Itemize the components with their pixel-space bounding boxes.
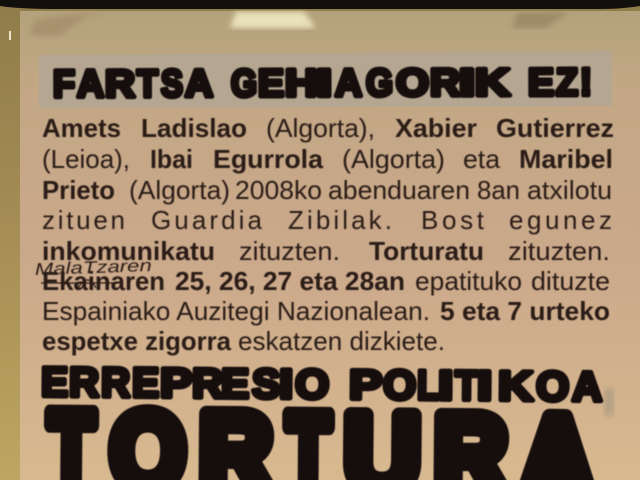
heading: errepresio politikoa <box>41 358 602 410</box>
heading: errepresio politikoa: I <box>438 361 453 409</box>
body text: Prieto <box>42 175 115 205</box>
body text: zituzten. <box>239 236 340 266</box>
title: fartsa gehiagorik ez: R <box>105 63 135 106</box>
body text: Ibai <box>150 144 193 174</box>
shadow beside second heading <box>604 388 614 416</box>
body text: Amets <box>42 113 121 143</box>
pin marks <box>9 31 11 40</box>
tape shadow left <box>30 13 110 36</box>
body text: dituzte <box>531 266 610 296</box>
heading: errepresio politikoa: E <box>41 358 68 405</box>
body text: (Algorta) <box>342 144 445 174</box>
heading: errepresio politikoa: I <box>279 360 293 407</box>
body text: (Algorta) <box>129 175 230 205</box>
headline: tortura <box>48 389 594 480</box>
body text: 25, 26, 27 eta 28an <box>175 266 405 296</box>
heading: errepresio politikoa: E <box>221 360 249 407</box>
body text: epatituko <box>415 266 522 296</box>
title: fartsa gehiagorik ez: G <box>231 62 257 105</box>
title: fartsa gehiagorik ez: A <box>335 62 362 105</box>
heading: errepresio politikoa: E <box>132 359 159 406</box>
body text: Ladislao <box>141 113 247 143</box>
body text: espetxe zigorra <box>42 326 232 356</box>
body text: zituen <box>42 205 125 235</box>
heading: errepresio politikoa: R <box>69 358 99 406</box>
title: fartsa gehiagorik ez: ! <box>580 61 592 104</box>
body text: Zibilak. <box>288 205 392 235</box>
body text: Torturatu <box>369 236 484 266</box>
heading: errepresio politikoa: O <box>295 360 329 408</box>
heading: errepresio politikoa: O <box>383 361 416 408</box>
title: fartsa gehiagorik ez: K <box>475 61 510 105</box>
title: fartsa gehiagorik ez <box>53 61 592 106</box>
body text: 2008ko <box>235 175 322 205</box>
body text: Espainiako Auzitegi Nazionalean. <box>42 296 430 326</box>
heading: errepresio politikoa: R <box>192 359 223 407</box>
heading: errepresio politikoa: I <box>477 362 492 409</box>
body text: eta <box>463 144 501 174</box>
body text: (Algorta), <box>266 113 375 143</box>
body text: (Leioa), <box>42 144 130 174</box>
title: fartsa gehiagorik ez: G <box>366 62 393 105</box>
title: fartsa gehiagorik ez: A <box>77 63 104 106</box>
handwritten correction: MalaTzaren <box>34 256 152 279</box>
heading: errepresio politikoa: A <box>572 363 602 410</box>
title: fartsa gehiagorik ez: I <box>316 62 332 105</box>
body text: Ekainaren <box>42 266 165 296</box>
heading band <box>39 51 612 108</box>
heading: errepresio politikoa: P <box>160 359 192 406</box>
light reflection <box>230 12 316 28</box>
heading: errepresio politikoa: P <box>349 361 382 408</box>
title: fartsa gehiagorik ez: E <box>528 61 554 104</box>
body text: Bost <box>421 205 485 235</box>
body text: abenduaren <box>328 175 470 205</box>
body text: 8an <box>477 175 520 205</box>
body text: Gutierrez <box>496 113 614 143</box>
handwritten correction <box>34 256 152 288</box>
heading: errepresio politikoa: O <box>536 362 569 410</box>
body text: Xabier <box>395 113 477 143</box>
title: fartsa gehiagorik ez: Z <box>556 61 578 104</box>
title: fartsa gehiagorik ez: O <box>396 62 429 105</box>
heading: errepresio politikoa: K <box>498 362 533 409</box>
title: fartsa gehiagorik ez: A <box>185 62 213 106</box>
body text: zituzten. <box>508 236 610 266</box>
body text: 5 eta 7 urteko <box>440 296 610 326</box>
title: fartsa gehiagorik ez: F <box>53 63 75 106</box>
title: fartsa gehiagorik ez: I <box>459 62 475 105</box>
body text: eskatzen dizkiete. <box>238 326 445 356</box>
dark top frame <box>0 0 640 9</box>
title: fartsa gehiagorik ez: S <box>161 63 183 106</box>
tape shadow right <box>512 12 570 28</box>
title: fartsa gehiagorik ez: H <box>285 62 317 105</box>
heading: errepresio politikoa: S <box>252 360 280 407</box>
body text: atxilotu <box>527 175 612 205</box>
heading: errepresio politikoa: L <box>417 361 439 408</box>
heading: errepresio politikoa: T <box>455 362 478 409</box>
body text: egunez <box>509 205 612 235</box>
body text: inkomunikatu <box>42 236 215 266</box>
body text: Egurrola <box>213 144 324 174</box>
title: fartsa gehiagorik ez: R <box>430 62 460 105</box>
title: fartsa gehiagorik ez: T <box>137 63 158 106</box>
body text <box>42 113 614 356</box>
heading: errepresio politikoa: R <box>101 359 130 406</box>
title: fartsa gehiagorik ez: E <box>258 62 284 105</box>
body text: Maribel <box>519 144 613 174</box>
body text: Guardia <box>151 205 263 235</box>
